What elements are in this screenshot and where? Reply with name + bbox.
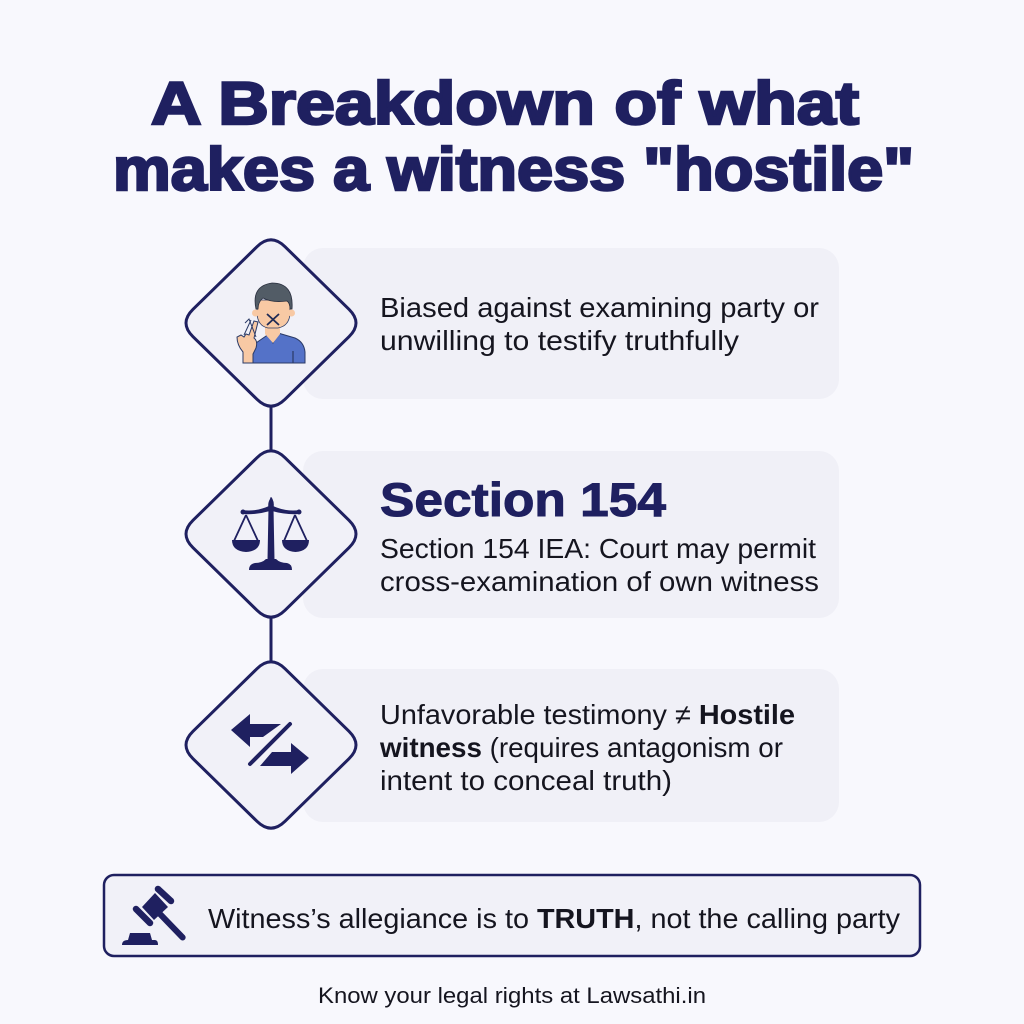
text: unfavorable testimony description: witness (requires antagonism or	[379, 732, 783, 763]
panel: section 154	[303, 451, 839, 618]
text: biased witness description: Biased against examining party or	[380, 292, 819, 323]
text: unfavorable testimony description: Unfavorable testimony ≠ Hostile	[380, 699, 795, 730]
icon: witness with crossed fingers and crossed mouth	[237, 283, 305, 363]
diamond: scales of justice	[186, 451, 356, 617]
connector: first to second step	[270, 405, 272, 453]
text: section 154 description	[380, 533, 819, 597]
title	[113, 70, 914, 203]
icon: opposing arrows with slash	[231, 714, 309, 774]
text: section 154 description: Section 154 IEA: Court may permit	[380, 533, 816, 564]
text: unfavorable testimony description: intent to conceal truth)	[380, 765, 672, 796]
title: A Breakdown of what	[151, 70, 859, 137]
diamond: biased witness	[186, 240, 356, 406]
connector: second to third step	[270, 616, 272, 664]
icon: scales of justice	[232, 497, 309, 570]
text: section 154 description: cross-examination of own witness	[380, 566, 819, 597]
heading: section 154: Section 154	[380, 473, 666, 526]
text: allegiance statement: Witness’s allegiance is to TRUTH, not the calling party	[208, 903, 900, 934]
panel: biased witness	[303, 248, 839, 399]
diamond: not equal arrows	[186, 662, 356, 828]
icon: gavel	[122, 889, 185, 945]
text: unfavorable testimony description	[379, 699, 795, 796]
text: biased witness description	[380, 292, 819, 356]
text: biased witness description: unwilling to testify truthfully	[380, 325, 739, 356]
title: makes a witness "hostile"	[113, 136, 914, 203]
panel: unfavorable testimony	[303, 669, 839, 822]
callout: allegiance to truth	[104, 875, 920, 956]
footer: Know your legal rights at Lawsathi.in	[318, 983, 706, 1008]
